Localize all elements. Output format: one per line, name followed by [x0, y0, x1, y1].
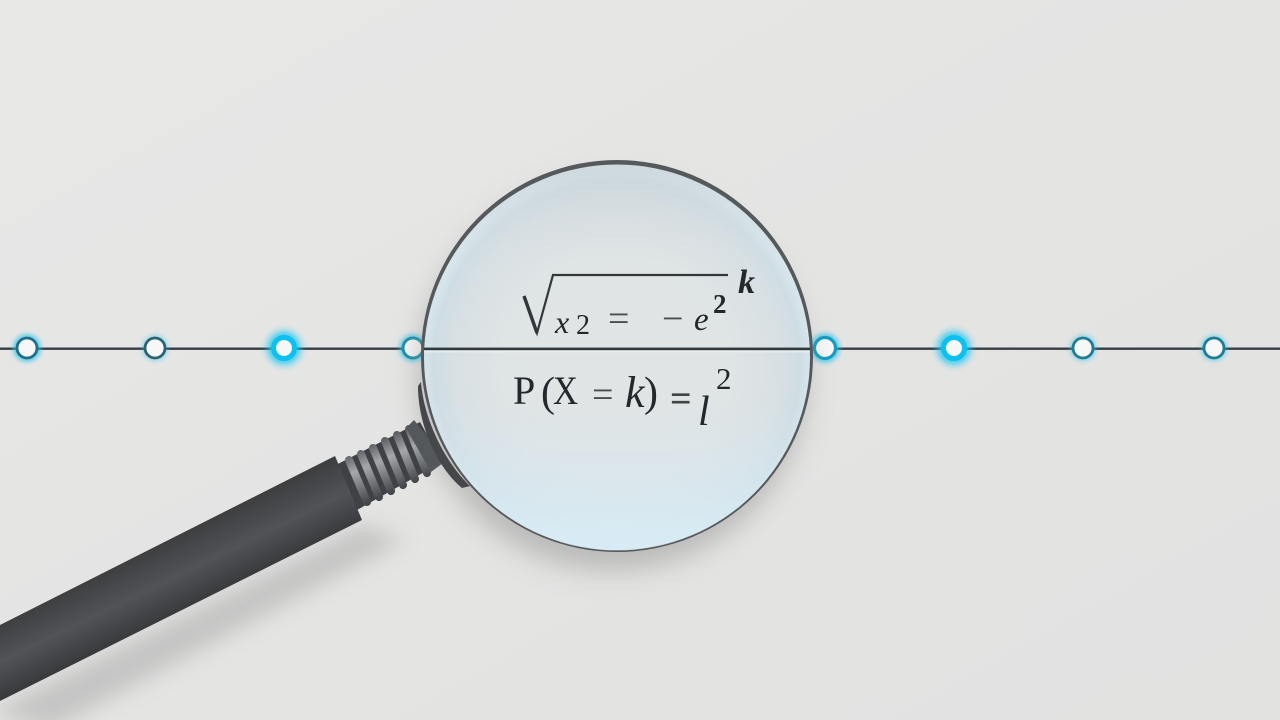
lower formula: P: [513, 368, 535, 413]
node 2: [142, 335, 168, 361]
lower formula: k: [625, 368, 646, 417]
lower formula: (: [541, 370, 555, 416]
lens rim: [421, 160, 813, 552]
node 3, highlighted: [267, 331, 301, 365]
lower formula: 2: [716, 361, 732, 396]
node 5: [810, 333, 840, 363]
threaded collar: [330, 420, 447, 514]
lower formula: ): [644, 370, 658, 416]
upper formula: 2: [576, 310, 590, 341]
lower formula: [513, 361, 732, 435]
number line: [0, 331, 1280, 365]
node 6, highlighted: [937, 331, 971, 365]
upper formula: −: [662, 298, 683, 340]
magnifying glass: [0, 160, 813, 706]
magnified line: [424, 348, 810, 352]
upper formula: x: [554, 304, 569, 340]
lower formula: l: [698, 389, 710, 435]
upper formula: =: [608, 298, 629, 340]
upper formula: [524, 264, 755, 341]
radical sign: [524, 275, 728, 333]
node 7: [1070, 335, 1096, 361]
lower formula: X: [553, 368, 578, 413]
handle grip: [0, 456, 362, 706]
upper formula: k: [738, 264, 755, 301]
upper formula: 2: [713, 289, 726, 319]
node 8: [1201, 335, 1227, 361]
node 4: [399, 334, 427, 362]
upper formula: e: [694, 302, 709, 338]
lens bracket at the handle: [418, 382, 470, 488]
node 1: [13, 334, 41, 362]
lens glass: [423, 162, 811, 550]
lower formula: =: [670, 378, 692, 420]
lower formula: =: [592, 374, 613, 416]
magnifying glass shadow: [0, 182, 806, 720]
